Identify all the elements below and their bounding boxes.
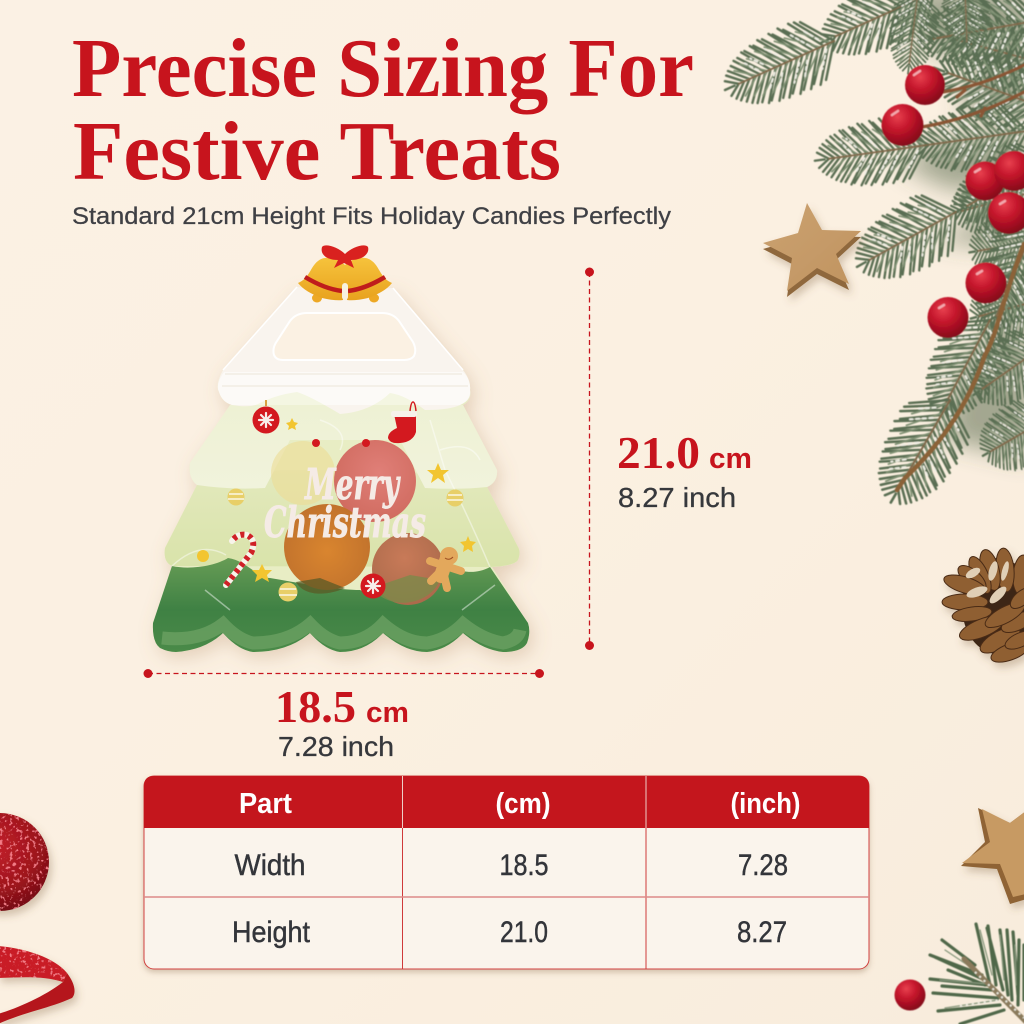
- dimension line: height: [585, 268, 594, 650]
- table row: width: 18.5: [500, 849, 548, 882]
- bag silhouette: [153, 287, 529, 652]
- dimension line: width: [144, 669, 544, 678]
- icon: red ornament: [252, 400, 280, 434]
- table row: width: 7.28: [738, 849, 788, 882]
- icon: wooden star top: [763, 203, 861, 297]
- text: Merry Christmas: [264, 460, 426, 547]
- text: Merry Christmas: Merry: [304, 460, 401, 509]
- width label: cm: [366, 697, 409, 729]
- table row: width: Width: [234, 849, 306, 882]
- icon: candy cane: [226, 535, 253, 585]
- width label: [275, 681, 409, 762]
- width label: 7.28 inch: [278, 731, 394, 762]
- handle cut-out: [273, 313, 415, 360]
- text: Merry Christmas: Christmas: [264, 498, 426, 547]
- pine sprig bottom right and berry: [894, 924, 1024, 1024]
- table row: height: 21.0: [500, 916, 548, 949]
- icon: small yellow baubles and stars: [197, 418, 476, 602]
- icon: red glitter ball: [0, 813, 49, 911]
- icon: bell and bow: [298, 245, 392, 302]
- icon: bottom berry: [894, 980, 926, 1010]
- height label: 8.27 inch: [618, 482, 736, 513]
- height label: 21.0: [617, 427, 700, 478]
- stems: [897, 244, 1024, 490]
- tier 2: [165, 470, 520, 567]
- icon: gingerbread man: [430, 547, 461, 588]
- table row: height: Height: [232, 916, 311, 949]
- title: [72, 22, 694, 198]
- handle with zipper: [218, 287, 470, 414]
- icon: red berries: [882, 65, 1024, 338]
- tier 3 green: [153, 558, 529, 652]
- title: Precise Sizing For: [72, 22, 694, 115]
- table header row: (inch): [730, 788, 800, 820]
- title: Festive Treats: [73, 105, 561, 198]
- reflections: [172, 420, 495, 610]
- tier 1: [190, 405, 497, 489]
- pine branches and berries: top right: [711, 0, 1024, 521]
- green scalloped edge: [162, 624, 520, 643]
- candies: [271, 440, 444, 605]
- icon: stocking: [388, 402, 417, 443]
- table row: height: [232, 916, 787, 949]
- table header row: (cm): [496, 788, 550, 820]
- table row: height: 8.27: [737, 916, 787, 949]
- width label: 18.5: [275, 681, 356, 732]
- icon: red snowflake ornament bottom: [360, 574, 386, 598]
- subtitle: Standard 21cm Height Fits Holiday Candies Perfectly: [72, 203, 671, 230]
- product: tree shaped bag: [153, 245, 529, 652]
- table: [144, 776, 869, 969]
- icon: red ribbon: [0, 946, 75, 1024]
- height label: cm: [709, 443, 752, 475]
- icon: wooden star right: [961, 808, 1024, 904]
- table row: width: [234, 849, 788, 882]
- table header row: [144, 776, 869, 828]
- table header row: Part: [239, 788, 292, 820]
- icon: pine cone: [942, 547, 1024, 666]
- height label: [617, 427, 752, 513]
